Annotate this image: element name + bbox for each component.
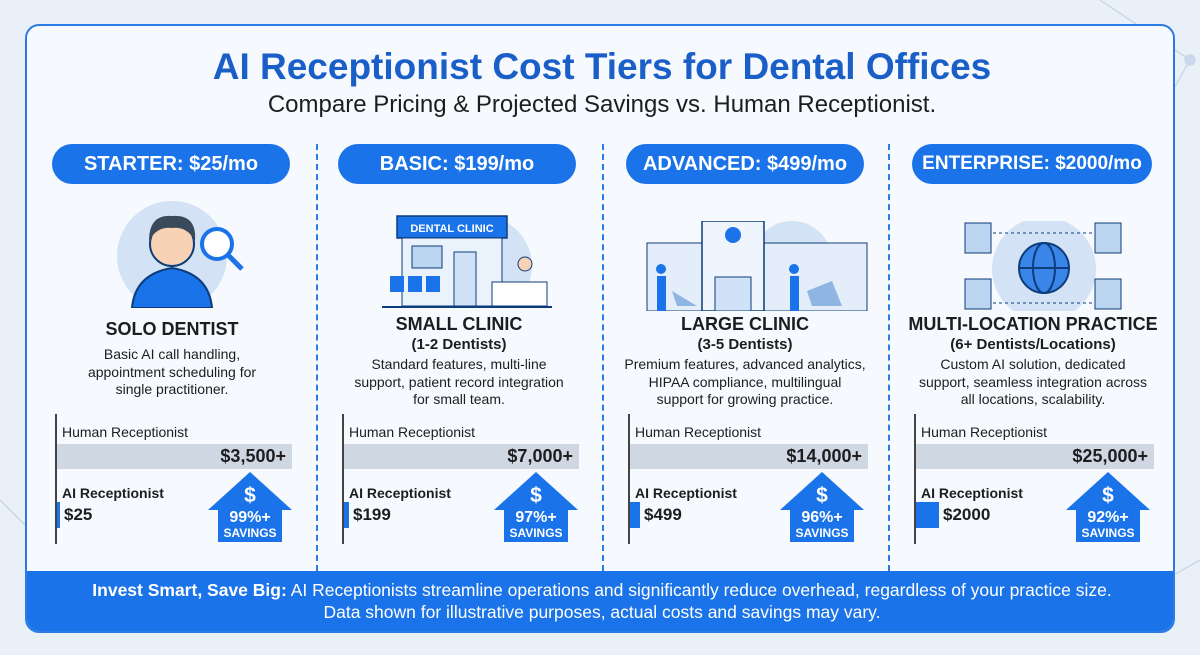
column 4 text: (6+ Dentists/Locations) <box>950 336 1116 353</box>
chart: basic: $7,000+ <box>507 446 573 466</box>
chart: advanced: Human Receptionist <box>635 424 761 440</box>
savings arrow: basic: $ <box>530 484 542 507</box>
icon: dental clinic: DENTAL CLINIC <box>410 223 494 235</box>
column 1 text: Basic AI call handling, <box>104 346 240 362</box>
footer banner <box>27 571 1177 635</box>
savings arrow: enterprise: 92%+ <box>1087 509 1129 526</box>
chart: advanced <box>628 414 868 544</box>
chart: enterprise <box>914 414 1154 544</box>
pill: starter: STARTER: $25/mo <box>84 153 258 175</box>
column 4 text: all locations, scalability. <box>961 391 1105 407</box>
column 3 text: Premium features, advanced analytics, <box>624 356 866 372</box>
savings arrow: advanced: 96%+ <box>801 509 843 526</box>
chart: starter <box>55 414 295 544</box>
savings arrow: advanced: SAVINGS <box>795 526 849 540</box>
savings arrow: basic <box>494 472 578 542</box>
chart: basic <box>342 414 582 544</box>
column 3 text <box>624 314 866 407</box>
column 4 text <box>908 314 1158 407</box>
chart: advanced: $499 <box>644 505 682 524</box>
chart: advanced: $14,000+ <box>786 446 862 466</box>
chart: enterprise: AI Receptionist <box>921 485 1023 501</box>
savings arrow: advanced: $ <box>816 484 828 507</box>
column 3 text: (3-5 Dentists) <box>697 336 793 353</box>
column 2 text: SMALL CLINIC <box>396 314 522 334</box>
column 2 text <box>354 314 564 407</box>
column 2 text: (1-2 Dentists) <box>411 336 507 353</box>
pill: basic <box>338 144 576 184</box>
column 1 text: appointment scheduling for <box>88 364 256 380</box>
savings arrow: basic: SAVINGS <box>509 526 563 540</box>
chart: basic: Human Receptionist <box>349 424 475 440</box>
column 3 text: support for growing practice. <box>657 391 833 407</box>
column 3 text: LARGE CLINIC <box>681 314 809 334</box>
icon: dental clinic <box>382 215 552 308</box>
chart: enterprise: $25,000+ <box>1072 446 1148 466</box>
column 3 text: HIPAA compliance, multilingual <box>649 374 841 390</box>
title: AI Receptionist Cost Tiers for Dental Offices <box>213 46 991 87</box>
chart: starter: Human Receptionist <box>62 424 188 440</box>
savings arrow: starter: SAVINGS <box>223 526 277 540</box>
chart: enterprise: $2000 <box>943 505 990 524</box>
column 1 text: single practitioner. <box>116 381 228 397</box>
column 1 text <box>88 319 256 397</box>
savings arrow: starter <box>208 472 292 542</box>
column 2 text: support, patient record integration <box>354 374 564 390</box>
column 4 text: support, seamless integration across <box>919 374 1147 390</box>
savings arrow: starter: $ <box>244 484 256 507</box>
chart: starter: $3,500+ <box>220 446 286 466</box>
chart: basic: AI Receptionist <box>349 485 451 501</box>
column 4 text: MULTI-LOCATION PRACTICE <box>908 314 1158 334</box>
icon: dentist <box>117 201 244 308</box>
chart: basic: $199 <box>353 505 391 524</box>
subtitle: Compare Pricing & Projected Savings vs. Human Receptionist. <box>268 91 936 118</box>
chart: advanced: AI Receptionist <box>635 485 737 501</box>
pill: enterprise <box>912 144 1152 184</box>
savings arrow: enterprise: $ <box>1102 484 1114 507</box>
pill: enterprise: ENTERPRISE: $2000/mo <box>922 153 1142 174</box>
footer banner: Invest Smart, Save Big: AI Receptionists streamline operations and significantly reduce overhead, regardless of your practice size. <box>92 580 1112 600</box>
pill: advanced: ADVANCED: $499/mo <box>643 153 847 175</box>
icon: multi-location globe <box>964 221 1122 311</box>
pill: starter <box>52 144 290 184</box>
savings arrow: starter: 99%+ <box>229 509 271 526</box>
column 2 text: for small team. <box>413 391 505 407</box>
column 4 text: Custom AI solution, dedicated <box>940 356 1126 372</box>
pill: advanced <box>626 144 864 184</box>
column 2 text: Standard features, multi-line <box>371 356 547 372</box>
footer banner: Data shown for illustrative purposes, actual costs and savings may vary. <box>323 602 880 622</box>
savings arrow: advanced <box>780 472 864 542</box>
chart: starter: $25 <box>64 505 92 524</box>
savings arrow: enterprise: SAVINGS <box>1081 526 1135 540</box>
icon: large clinic <box>646 221 868 311</box>
pill: basic: BASIC: $199/mo <box>380 153 534 175</box>
savings arrow: basic: 97%+ <box>515 509 557 526</box>
chart: enterprise: Human Receptionist <box>921 424 1047 440</box>
savings arrow: enterprise <box>1066 472 1150 542</box>
chart: starter: AI Receptionist <box>62 485 164 501</box>
column 1 text: SOLO DENTIST <box>105 319 238 339</box>
